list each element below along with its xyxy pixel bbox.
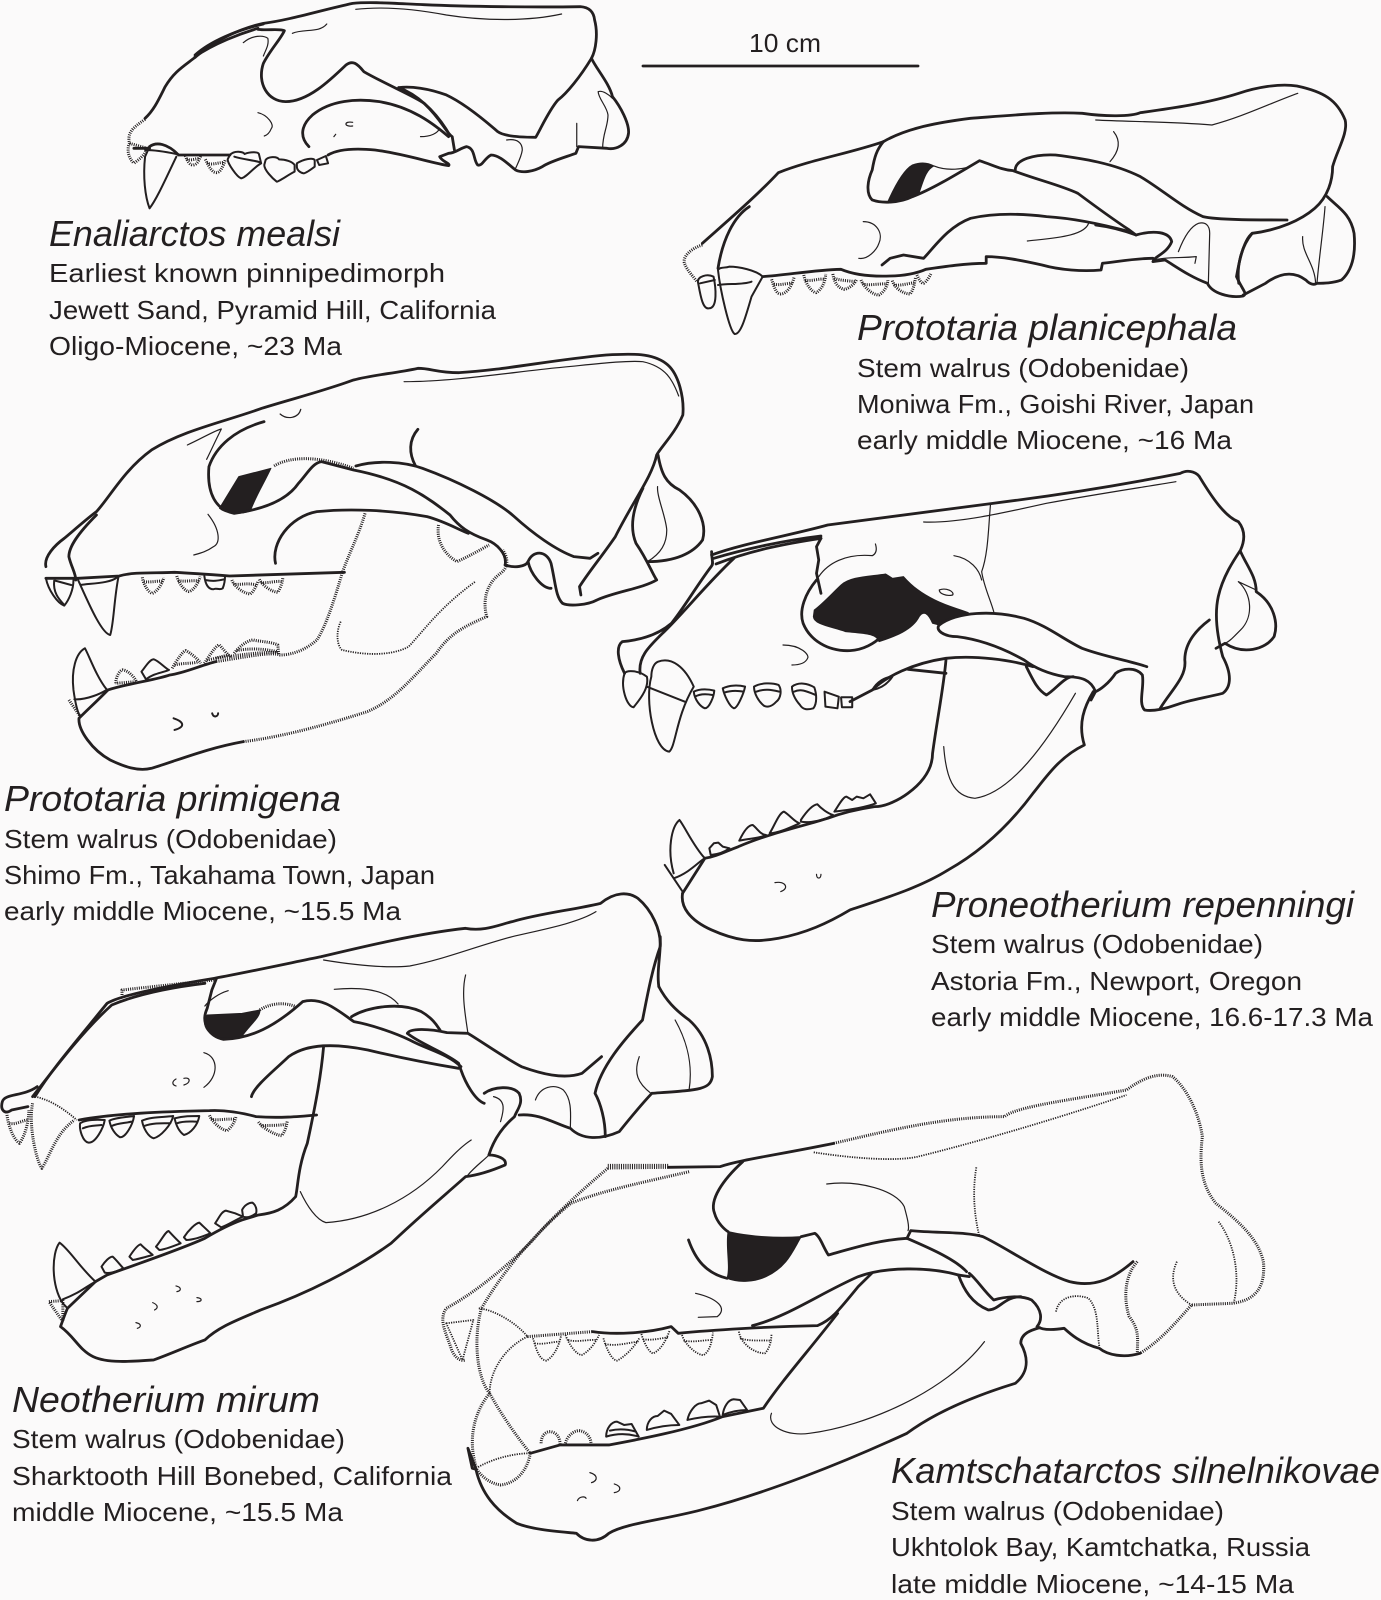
skull: Proneotherium repenningi: [618, 471, 1276, 941]
caption: Prototaria primigena: Prototaria primigena: [4, 778, 341, 819]
caption: Neotherium mirum: Stem walrus (Odobenidae): [12, 1424, 345, 1454]
dotted jaw and teeth: [69, 459, 507, 742]
caption: Enaliarctos mealsi: Jewett Sand, Pyramid Hill, California: [49, 295, 497, 325]
caption: Prototaria planicephala: Stem walrus (Odobenidae): [857, 353, 1189, 383]
dark orbital fill: [727, 1232, 801, 1281]
caption: Neotherium mirum: Neotherium mirum: [12, 1379, 320, 1420]
skull: Prototaria primigena: [46, 354, 704, 769]
caption: Prototaria primigena: Shimo Fm., Takahama Town, Japan: [4, 860, 435, 890]
caption: Neotherium mirum: middle Miocene, ~15.5 Ma: [12, 1497, 344, 1527]
dark orbital fill: [813, 574, 968, 642]
caption: Enaliarctos mealsi: [49, 213, 497, 361]
caption: Prototaria planicephala: [857, 307, 1254, 455]
caption: Enaliarctos mealsi: Earliest known pinnipedimorph: [49, 258, 445, 288]
skull: Enaliarctos mealsi: [128, 3, 629, 208]
reconstructed dotted snout: [128, 119, 225, 173]
caption: Enaliarctos mealsi: Oligo-Miocene, ~23 Ma: [49, 331, 343, 361]
caption: Prototaria planicephala: early middle Miocene, ~16 Ma: [857, 425, 1233, 455]
caption: Kamtschatarctos silnelnikovae: [891, 1450, 1380, 1599]
caption: Kamtschatarctos silnelnikovae: Ukhtolok Bay, Kamtchatka, Russia: [891, 1532, 1311, 1562]
upper teeth: [144, 147, 328, 208]
caption: Proneotherium repenningi: Astoria Fm., Newport, Oregon: [931, 966, 1302, 996]
caption: Prototaria primigena: [4, 778, 435, 926]
caption: Prototaria primigena: Stem walrus (Odobenidae): [4, 824, 337, 854]
caption: Kamtschatarctos silnelnikovae: Stem walrus (Odobenidae): [891, 1496, 1224, 1526]
dark orbital fill: [205, 1010, 260, 1038]
dark orbital fill: [219, 468, 271, 513]
caption: Prototaria primigena: early middle Miocene, ~15.5 Ma: [4, 896, 402, 926]
skull: Prototaria planicephala: [684, 85, 1355, 334]
caption: Kamtschatarctos silnelnikovae: Kamtschatarctos silnelnikovae: [891, 1450, 1380, 1491]
skull: Neotherium mirum: [2, 894, 712, 1361]
teeth and canines: [46, 576, 225, 730]
scale bar: 10 cm: 10 cm: [749, 28, 821, 58]
caption: Prototaria planicephala: Moniwa Fm., Goishi River, Japan: [857, 389, 1254, 419]
caption: Proneotherium repenningi: early middle Miocene, 16.6-17.3 Ma: [931, 1002, 1374, 1032]
caption: Proneotherium repenningi: Proneotherium repenningi: [931, 884, 1355, 925]
caption: Kamtschatarctos silnelnikovae: late middle Miocene, ~14-15 Ma: [891, 1569, 1295, 1599]
caption: Neotherium mirum: [12, 1379, 453, 1527]
skull: Kamtschatarctos silnelnikovae: [443, 1075, 1264, 1540]
lower teeth: [606, 1399, 747, 1437]
dotted snout and cheek teeth: [684, 245, 931, 295]
dotted reconstruction: [443, 1075, 1264, 1485]
caption: Proneotherium repenningi: [931, 884, 1374, 1032]
dark orbital fill: [888, 163, 934, 202]
caption: Proneotherium repenningi: Stem walrus (Odobenidae): [931, 929, 1263, 959]
dotted canine and teeth: [7, 980, 296, 1322]
upper canine and incisor: [698, 267, 763, 334]
caption: Enaliarctos mealsi: Enaliarctos mealsi: [49, 213, 341, 254]
teeth and lower canine: [54, 1116, 256, 1308]
teeth and canines: [623, 660, 892, 892]
caption: Neotherium mirum: Sharktooth Hill Bonebed, California: [12, 1461, 453, 1491]
caption: Prototaria planicephala: Prototaria planicephala: [857, 307, 1237, 348]
